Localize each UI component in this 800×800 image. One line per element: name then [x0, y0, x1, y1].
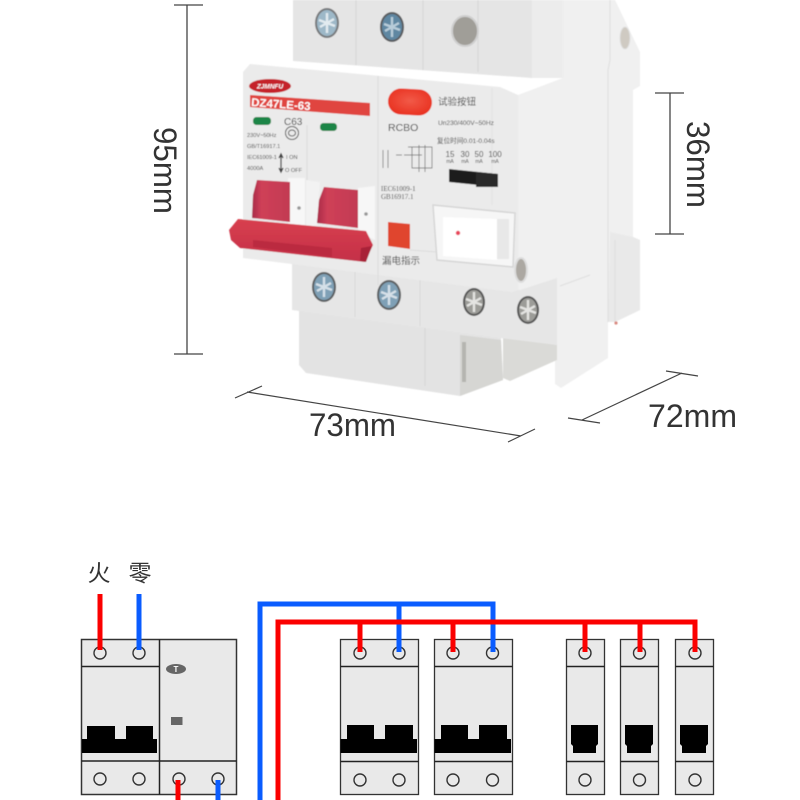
RCD text block: Un230/400V~50Hz	[438, 120, 494, 127]
live wires (red)	[100, 594, 695, 800]
front panel	[243, 64, 527, 292]
screw: lower fourth	[517, 296, 539, 324]
leakage current scale: 100	[488, 150, 502, 159]
reset window	[433, 205, 515, 267]
RCD text block: 试验按钮	[438, 96, 477, 108]
screw: top middle	[380, 12, 404, 42]
wiring symbol	[383, 145, 432, 172]
terminal hole	[452, 16, 478, 46]
rating text block: I ON	[286, 155, 298, 161]
two-pole breaker 2	[434, 640, 512, 794]
CCC mark	[286, 126, 298, 140]
rating text block: GB/T16917.1	[247, 144, 280, 150]
indicator	[171, 717, 182, 725]
screw: top left	[315, 8, 339, 38]
single-pole breaker 2	[620, 640, 658, 794]
dimension: 72mm length	[568, 371, 737, 434]
single-pole breaker 3	[676, 640, 714, 794]
rating text block: O OFF	[285, 168, 303, 174]
test button: T	[174, 665, 179, 674]
RCBO test button	[387, 88, 433, 116]
green indicator lights	[253, 117, 337, 131]
leakage current scale: 30	[461, 150, 470, 159]
red handle bar	[229, 219, 373, 262]
screw: lower left	[312, 272, 336, 302]
toggle	[82, 726, 157, 753]
red brand logo	[249, 79, 291, 93]
lower terminal block	[292, 262, 557, 345]
rating text block: 230V~50Hz	[247, 133, 277, 139]
dimension: 73mm width	[235, 386, 535, 443]
rating text block: C63	[284, 117, 303, 128]
leakage current scale: mA	[491, 159, 499, 165]
test button	[166, 664, 186, 674]
dimension: 36mm depth	[655, 93, 716, 234]
product photo: circuit breaker	[229, 0, 640, 396]
dimension: 73mm width: 73mm	[309, 407, 396, 443]
rating text block	[247, 117, 303, 174]
red brand logo: ZJMNFU	[256, 84, 283, 90]
rating text block: 4000A	[247, 166, 263, 172]
red model band	[250, 95, 370, 116]
leakage current scale: mA	[446, 159, 454, 165]
dimension: 36mm depth: 36mm	[680, 121, 716, 208]
top terminal block	[293, 0, 563, 78]
leakage current scale: 15	[446, 150, 455, 159]
white toggle housings	[288, 178, 375, 240]
leakage current scale: mA	[461, 159, 469, 165]
RCD text block: 复位时间0.01-0.04s	[437, 136, 495, 145]
leakage current scale: mA	[475, 159, 483, 165]
leakage current scale	[446, 150, 502, 165]
neutral wires (blue)	[139, 594, 493, 800]
screw: lower second	[377, 280, 401, 310]
RCD text block: RCBO	[388, 122, 418, 134]
leakage current scale: 50	[475, 150, 484, 159]
wiring label: live and neutral: 零	[128, 560, 152, 586]
current selector slider	[449, 169, 498, 187]
two-pole breaker 1	[340, 640, 418, 794]
terminals	[94, 647, 224, 785]
red toggles	[252, 180, 358, 228]
RCD text block	[381, 96, 495, 267]
dimension: 95mm height	[147, 5, 203, 354]
on/off arrow	[279, 154, 283, 172]
rating text block: IEC61009-1	[247, 155, 277, 161]
lower housing	[299, 305, 557, 396]
main RCBO diagram	[82, 640, 236, 794]
dimension: 72mm length: 72mm	[648, 398, 737, 434]
leakage indicator	[388, 222, 410, 249]
screw: lower third	[463, 288, 485, 316]
single-pole breaker 1	[566, 640, 604, 794]
RCD text block: IEC61009-1	[381, 185, 416, 193]
RCD text block: GB16917.1	[381, 193, 414, 201]
dimension: 95mm height: 95mm	[147, 127, 183, 214]
wiring label: live and neutral: 火	[88, 560, 110, 586]
wiring label: live and neutral	[88, 560, 152, 586]
RCD text block: 漏电指示	[382, 255, 420, 267]
red model band: DZ47LE-63	[251, 97, 311, 113]
rail clip and side of housing	[476, 0, 640, 388]
